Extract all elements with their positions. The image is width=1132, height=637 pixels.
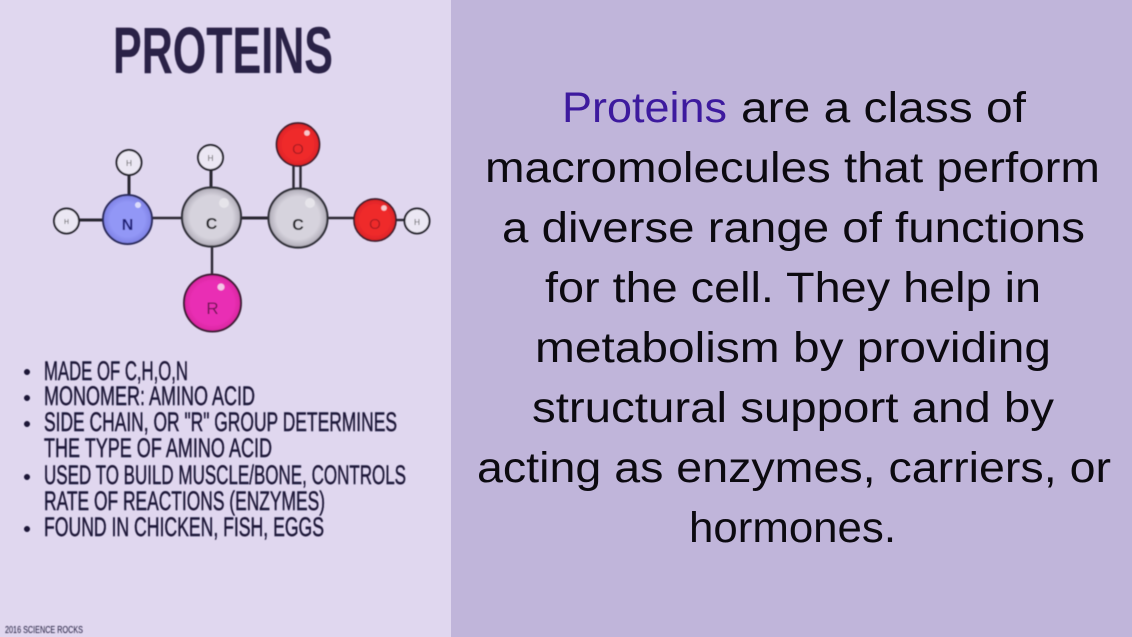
diagram: amino acid molecule [54,123,430,332]
atom: alpha carbon [182,188,241,246]
bullet: side chain: THE TYPE OF AMINO ACID [44,433,272,463]
atom: H right: H [414,218,420,227]
bullet: uses: RATE OF REACTIONS (ENZYMES) [44,486,325,516]
text block: protein definition: metabolism by providing [535,324,1051,372]
atom: R group: R [206,299,219,318]
atom: H above N [116,150,142,175]
bullet: monomer: MONOMER: AMINO ACID [44,381,255,411]
atom: double-bonded O: O [292,141,304,158]
atom: H above N: H [126,159,132,168]
text block: protein definition: Proteins [562,84,727,132]
bullet: uses [24,460,406,516]
panel: right definition background [451,0,1132,637]
atom: N [103,195,152,244]
bullet: uses: USED TO BUILD MUSCLE/BONE, CONTROLS [44,460,406,490]
panel: left summary background [0,0,451,637]
text block: protein definition: macromolecules that perform [485,144,1100,192]
atom: carboxyl carbon [268,188,328,248]
atom: H above alpha carbon: H [208,154,214,163]
text block: protein definition: a diverse range of functions [502,204,1085,252]
text block: protein definition [477,84,1111,552]
bonds [78,164,406,276]
atom: N: N [122,217,133,234]
bullet: monomer [24,381,255,411]
title: PROTEINS [113,13,333,87]
bullet: sources [24,512,324,542]
text block: protein definition: for the cell. They help in [545,264,1041,312]
atom: hydroxyl O: O [369,216,381,233]
bullet: side chain: SIDE CHAIN, OR "R" GROUP DETERMINES [44,407,397,437]
atom: alpha carbon: C [206,216,218,233]
atom: H left [54,208,79,234]
bullet: made of [24,356,188,386]
bullet: side chain [24,407,397,463]
atom: double-bonded O [276,123,320,166]
atom: hydroxyl O [354,199,396,241]
atom: R group [184,274,241,332]
text block: protein definition: acting as enzymes, carriers, or [477,444,1111,492]
text block: protein definition: structural support and by [532,384,1055,432]
atom: carboxyl carbon: C [292,217,304,234]
atom: H above alpha carbon [198,145,223,170]
bullet: made of: MADE OF C,H,O,N [44,356,188,386]
atom: H right [404,208,430,234]
text block: protein definition: are a class of [741,84,1027,132]
text block: protein definition: hormones. [689,504,896,552]
bullet list: protein facts [24,356,406,542]
bullet: sources: FOUND IN CHICKEN, FISH, EGGS [44,512,324,542]
atom: H left: H [64,219,69,226]
footer credit: 2016 SCIENCE ROCKS [5,625,83,636]
